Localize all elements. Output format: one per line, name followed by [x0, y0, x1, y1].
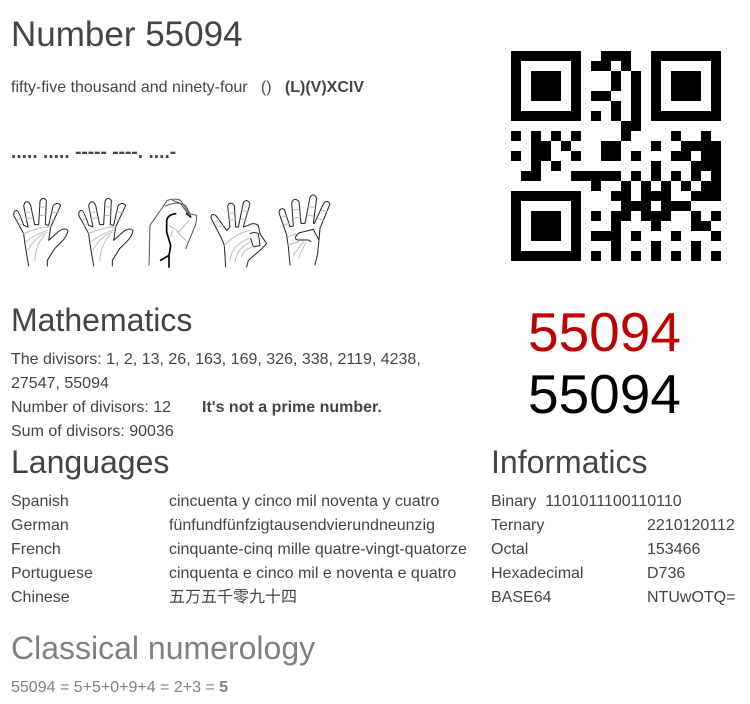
- Chinese value: 五万五千零九十四: [169, 589, 297, 606]
- Spanish label: Spanish: [11, 493, 69, 510]
- icon: fist hand digit 0: [149, 199, 197, 267]
- icon: open hand digit 5: [79, 198, 133, 266]
- divisors list: The divisors: 1, 2, 13, 26, 163, 169, 326, 338, 2119, 4238,: [11, 351, 421, 368]
- sum of divisors: Sum of divisors: 90036: [11, 423, 174, 440]
- number in words and roman numeral: fifty-five thousand and ninety-four () (L)(V)XCIV: [11, 79, 364, 96]
- Ternary value: 2210120112: [647, 517, 735, 534]
- QR code: [511, 51, 721, 261]
- Portuguese value: cinquenta e cinco mil e noventa e quatro: [169, 565, 456, 582]
- BASE64 value: NTUwOTQ=: [647, 589, 735, 606]
- morse code: ..... ..... ----- ----. ....-: [11, 142, 176, 163]
- Portuguese label: Portuguese: [11, 565, 93, 582]
- Chinese label: Chinese: [11, 589, 70, 606]
- heading: Classical numerology: Classical numerology: [11, 630, 315, 666]
- number of divisors: Number of divisors: 12: [11, 399, 171, 416]
- big number red: 55094: [528, 301, 681, 363]
- Octal value: 153466: [647, 541, 700, 558]
- Ternary label: Ternary: [491, 517, 544, 534]
- languages table: [11, 493, 467, 606]
- Hexadecimal label: Hexadecimal: [491, 565, 583, 582]
- BASE64 label: BASE64: [491, 589, 551, 606]
- title: Number 55094: [11, 15, 243, 54]
- heading: Languages: Languages: [11, 444, 169, 480]
- divisors list continued: 27547, 55094: [11, 375, 109, 392]
- Hexadecimal value: D736: [647, 565, 685, 582]
- heading: Mathematics: Mathematics: [11, 302, 192, 338]
- Spanish value: cincuenta y cinco mil noventa y cuatro: [169, 493, 439, 510]
- prime note: It's not a prime number.: [202, 399, 382, 416]
- Octal label: Octal: [491, 541, 528, 558]
- big number black: 55094: [528, 363, 681, 425]
- informatics table: [491, 493, 735, 606]
- heading: Informatics: Informatics: [491, 444, 647, 480]
- sign language hands: [13, 194, 330, 268]
- binary row: Binary 1101011100110110: [491, 493, 682, 510]
- German value: fünfundfünfzigtausendvierundneunzig: [169, 517, 435, 534]
- icon: hand digit 9: [211, 201, 267, 267]
- icon: hand digit 4: [279, 195, 330, 265]
- mathematics text: [11, 351, 421, 440]
- French value: cinquante-cinq mille quatre-vingt-quatorze: [169, 541, 467, 558]
- German label: German: [11, 517, 69, 534]
- icon: open hand digit 5: [14, 198, 68, 266]
- numerology calculation: 55094 = 5+5+0+9+4 = 2+3 = 5: [11, 679, 228, 696]
- French label: French: [11, 541, 61, 558]
